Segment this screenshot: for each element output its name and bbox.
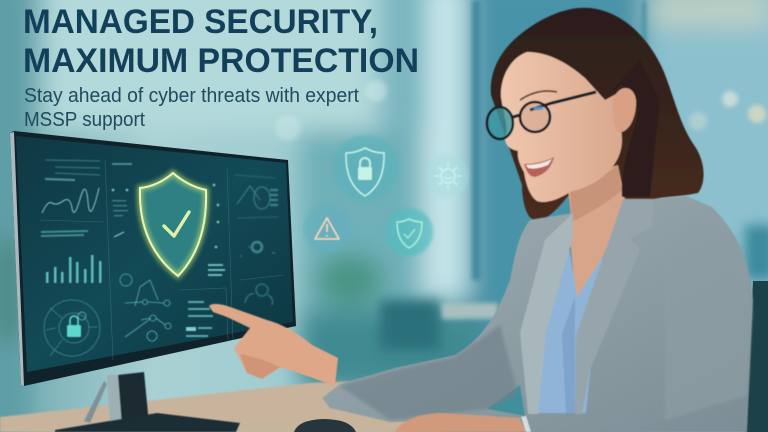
icon: padlock on dashboard [67,316,81,337]
mouth [524,157,554,177]
eyebrow [520,91,557,100]
pointing hand [209,304,338,386]
bar chart [41,230,102,283]
computer mouse [294,419,356,432]
mini trend and data nodes [112,163,225,276]
hair right of the face [605,60,660,197]
dashboard panel dividers [40,160,284,360]
gap between sleeve and torso [487,385,525,416]
subtitle [24,85,359,131]
monitor bezel [10,131,296,386]
icon: check mark [164,212,189,236]
blazer left lapel [520,213,573,414]
monitor screen [16,136,293,372]
line chart panel [42,160,100,213]
chair [745,281,768,432]
icon: warning triangle [303,205,351,253]
network graph panel [120,274,171,341]
subtitle: MSSP support [24,109,145,131]
blazer sleeve shading [665,222,752,420]
glasses [487,92,596,139]
ear [613,88,636,132]
data list panel [186,301,213,337]
icon: shield with check [385,208,433,256]
face [501,52,622,202]
title: MANAGED SECURITY, [23,3,378,41]
neck shadow [570,165,622,222]
monitor stand [55,372,240,432]
jacket cuff by lower hand [521,416,531,432]
title: MAXIMUM PROTECTION [23,42,419,80]
right dashboard charts [235,175,278,305]
icon: virus sun [427,155,469,197]
hair back [491,8,704,220]
finger shadow [240,354,280,379]
floating security icons [303,135,469,256]
woman [322,8,753,432]
radar lock panel [44,300,100,356]
shirt [536,240,603,413]
blazer right lapel [575,200,654,414]
icon: shield with lock [333,135,399,201]
title [23,3,419,80]
forearm sleeve shading [340,325,518,420]
lower hand [395,413,526,432]
monitor [10,131,296,386]
glowing shield with check [140,173,206,276]
subtitle: Stay ahead of cyber threats with expert [24,85,359,107]
blazer body [322,196,753,432]
neck and chest [566,165,625,300]
desk [0,378,440,432]
